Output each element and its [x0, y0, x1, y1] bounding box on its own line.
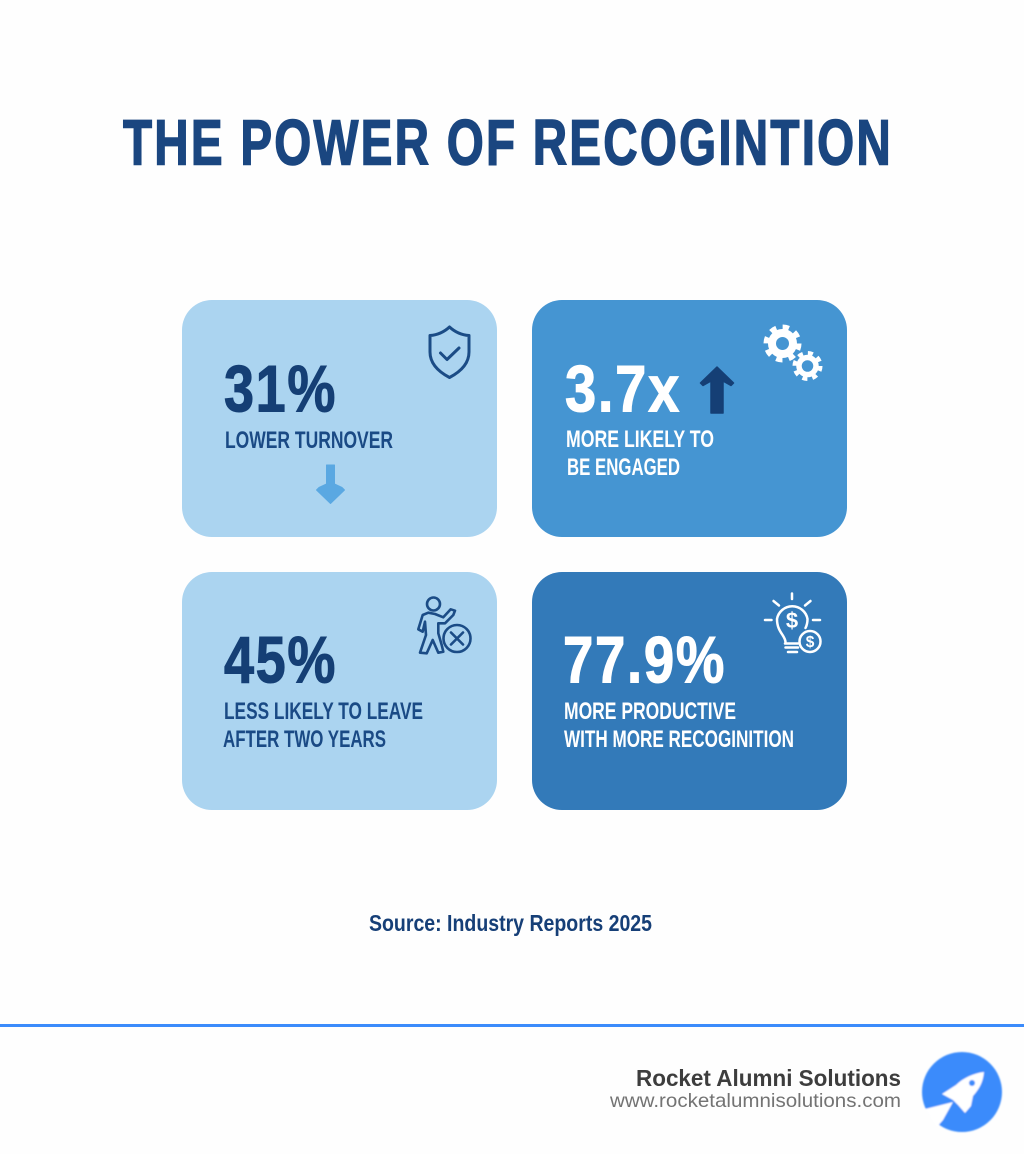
- icon: up arrow: [700, 367, 734, 413]
- icon: down arrow: [316, 465, 344, 504]
- stat: 3.7x: 3.7x: [565, 352, 681, 426]
- label: more likely to be engaged: BE ENGAGED: [567, 454, 680, 481]
- footer url: www.rocketalumnisolutions.com: [609, 1090, 901, 1112]
- panel: more productive: [532, 572, 847, 810]
- panel: less likely to leave: [182, 572, 497, 810]
- stat: 31%: 31%: [224, 352, 337, 426]
- icon: person leaving with x: [418, 598, 470, 653]
- label: more productive with more recoginition: [564, 698, 794, 753]
- label: more productive with more recoginition: WITH MORE RECOGINITION: [564, 726, 794, 753]
- panel: lower turnover: [182, 300, 497, 537]
- label: less likely to leave after two years: LESS LIKELY TO LEAVE: [224, 698, 423, 725]
- label: more likely to be engaged: [566, 426, 714, 481]
- icon: rocket logo: [922, 1052, 1002, 1132]
- icon: light bulb with dollar: $: [806, 634, 815, 651]
- source line: Source: Industry Reports 2025: [369, 910, 652, 936]
- icon: light bulb with dollar: $: [786, 608, 798, 633]
- label: less likely to leave after two years: AFTER TWO YEARS: [223, 726, 386, 753]
- panel: more likely to be engaged: [532, 300, 847, 537]
- icon: shield with check: [430, 327, 469, 378]
- label: less likely to leave after two years: [223, 698, 423, 753]
- label: more likely to be engaged: MORE LIKELY TO: [566, 426, 714, 453]
- icon: light bulb with dollar: [765, 594, 820, 652]
- footer rule: [0, 1024, 1024, 1027]
- stat: 45%: 45%: [224, 622, 337, 696]
- label: more productive with more recoginition: MORE PRODUCTIVE: [564, 698, 736, 725]
- icon: gears: [766, 327, 820, 379]
- label: lower turnover: LOWER TURNOVER: [225, 427, 393, 454]
- stat: 77.9%: 77.9%: [563, 622, 726, 696]
- footer brand name: Rocket Alumni Solutions: [636, 1065, 901, 1091]
